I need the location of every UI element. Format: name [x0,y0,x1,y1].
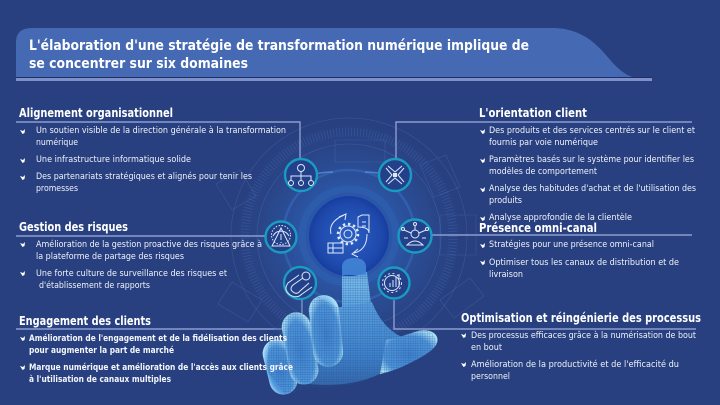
text block: la plateforme de partage des risques [36,252,184,262]
technology dial background [216,114,484,358]
text block [471,330,696,382]
panel: Engagement des clients [19,314,293,385]
text block: promesses [36,184,78,194]
icon: omni-channel [398,220,432,252]
text block: Des produits et des services centrés sur le client et [489,125,695,136]
icon: organisation [285,159,317,191]
icon: gear [338,224,358,244]
icon: arrow bottom [352,234,367,257]
connector lines [16,122,696,329]
text block [489,125,696,223]
text block: Stratégies pour une présence omni-canal [489,239,654,250]
bullets [480,243,485,265]
text block: pour augmenter la part de marché [29,345,174,356]
text block: produits [489,196,522,206]
heading: Présence omni-canal [479,221,597,235]
icon: magnet [284,267,316,299]
panel: Optimisation et réingénierie des processus [461,311,701,382]
text block: fournis par voie numérique [489,137,598,148]
bullets [20,242,25,276]
panel: Gestion des risques [19,220,262,291]
icon: risk [266,222,296,252]
bullets [461,333,466,367]
heading: Gestion des risques [19,220,128,234]
text block: Analyse des habitudes d'achat et de l'utilisation des [489,184,696,194]
text block: Un soutien visible de la direction générale à la transformation [36,125,286,136]
text block: Paramètres basés sur le système pour identifier les [489,154,694,165]
text block: Marque numérique et amélioration de l'accès aux clients grâce [29,362,293,373]
text block: Des partenariats stratégiques et alignés pour tenir les [36,171,252,182]
text block: Une infrastructure informatique solide [36,155,191,165]
text block: modèles de comportement [489,166,597,177]
text block [29,333,293,385]
text block: en bout [471,343,502,353]
text block: à l'utilisation de canaux multiples [29,375,171,385]
text block: Analyse approfondie de la clientèle [489,212,632,223]
text block: Amélioration de la gestion proactive des risques grâce à [36,239,262,250]
panel: Présence omni-canal [479,221,679,280]
text block: Amélioration de la productivité et de l'efficacité du [471,359,679,370]
palm [298,302,405,385]
text block: personnel [471,372,510,382]
title: se concentrer sur six domaines [29,56,248,72]
text block: Optimiser tous les canaux de distribution et de [489,258,679,268]
text block: d'établissement de rapports [39,280,150,291]
mesh overlay [266,258,437,394]
heading: L'orientation client [479,106,587,120]
bullets [480,129,485,221]
text block: livraison [489,270,523,280]
text block: numérique [36,137,78,148]
panel: Alignement organisationnel [19,106,286,194]
icon: process gear [378,268,410,298]
heading: Alignement organisationnel [19,106,173,120]
bullets [20,129,25,180]
title [29,38,529,72]
icon: server [328,243,343,253]
central hub [310,197,388,275]
panel: title banner [16,28,652,81]
text block [489,239,679,280]
heading: Engagement des clients [19,314,151,328]
bullets [20,336,25,370]
icon: document [358,215,369,233]
index finger [342,258,372,312]
icon: arrow top [331,214,346,234]
fingers [260,336,300,398]
icon: customer focus [379,159,411,191]
text block: Amélioration de l'engagement et de la fidélisation des clients [29,333,287,344]
text block [36,125,286,194]
thumb [380,330,438,374]
text block [36,239,262,291]
index fingertip [342,258,366,275]
text block: Une forte culture de surveillance des risques et [36,269,227,279]
text block: Des processus efficaces grâce à la numérisation de bout [471,330,696,341]
hand [260,258,438,398]
panel: L'orientation client [479,106,696,223]
title: L'élaboration d'une stratégie de transformation numérique implique de [29,38,529,54]
